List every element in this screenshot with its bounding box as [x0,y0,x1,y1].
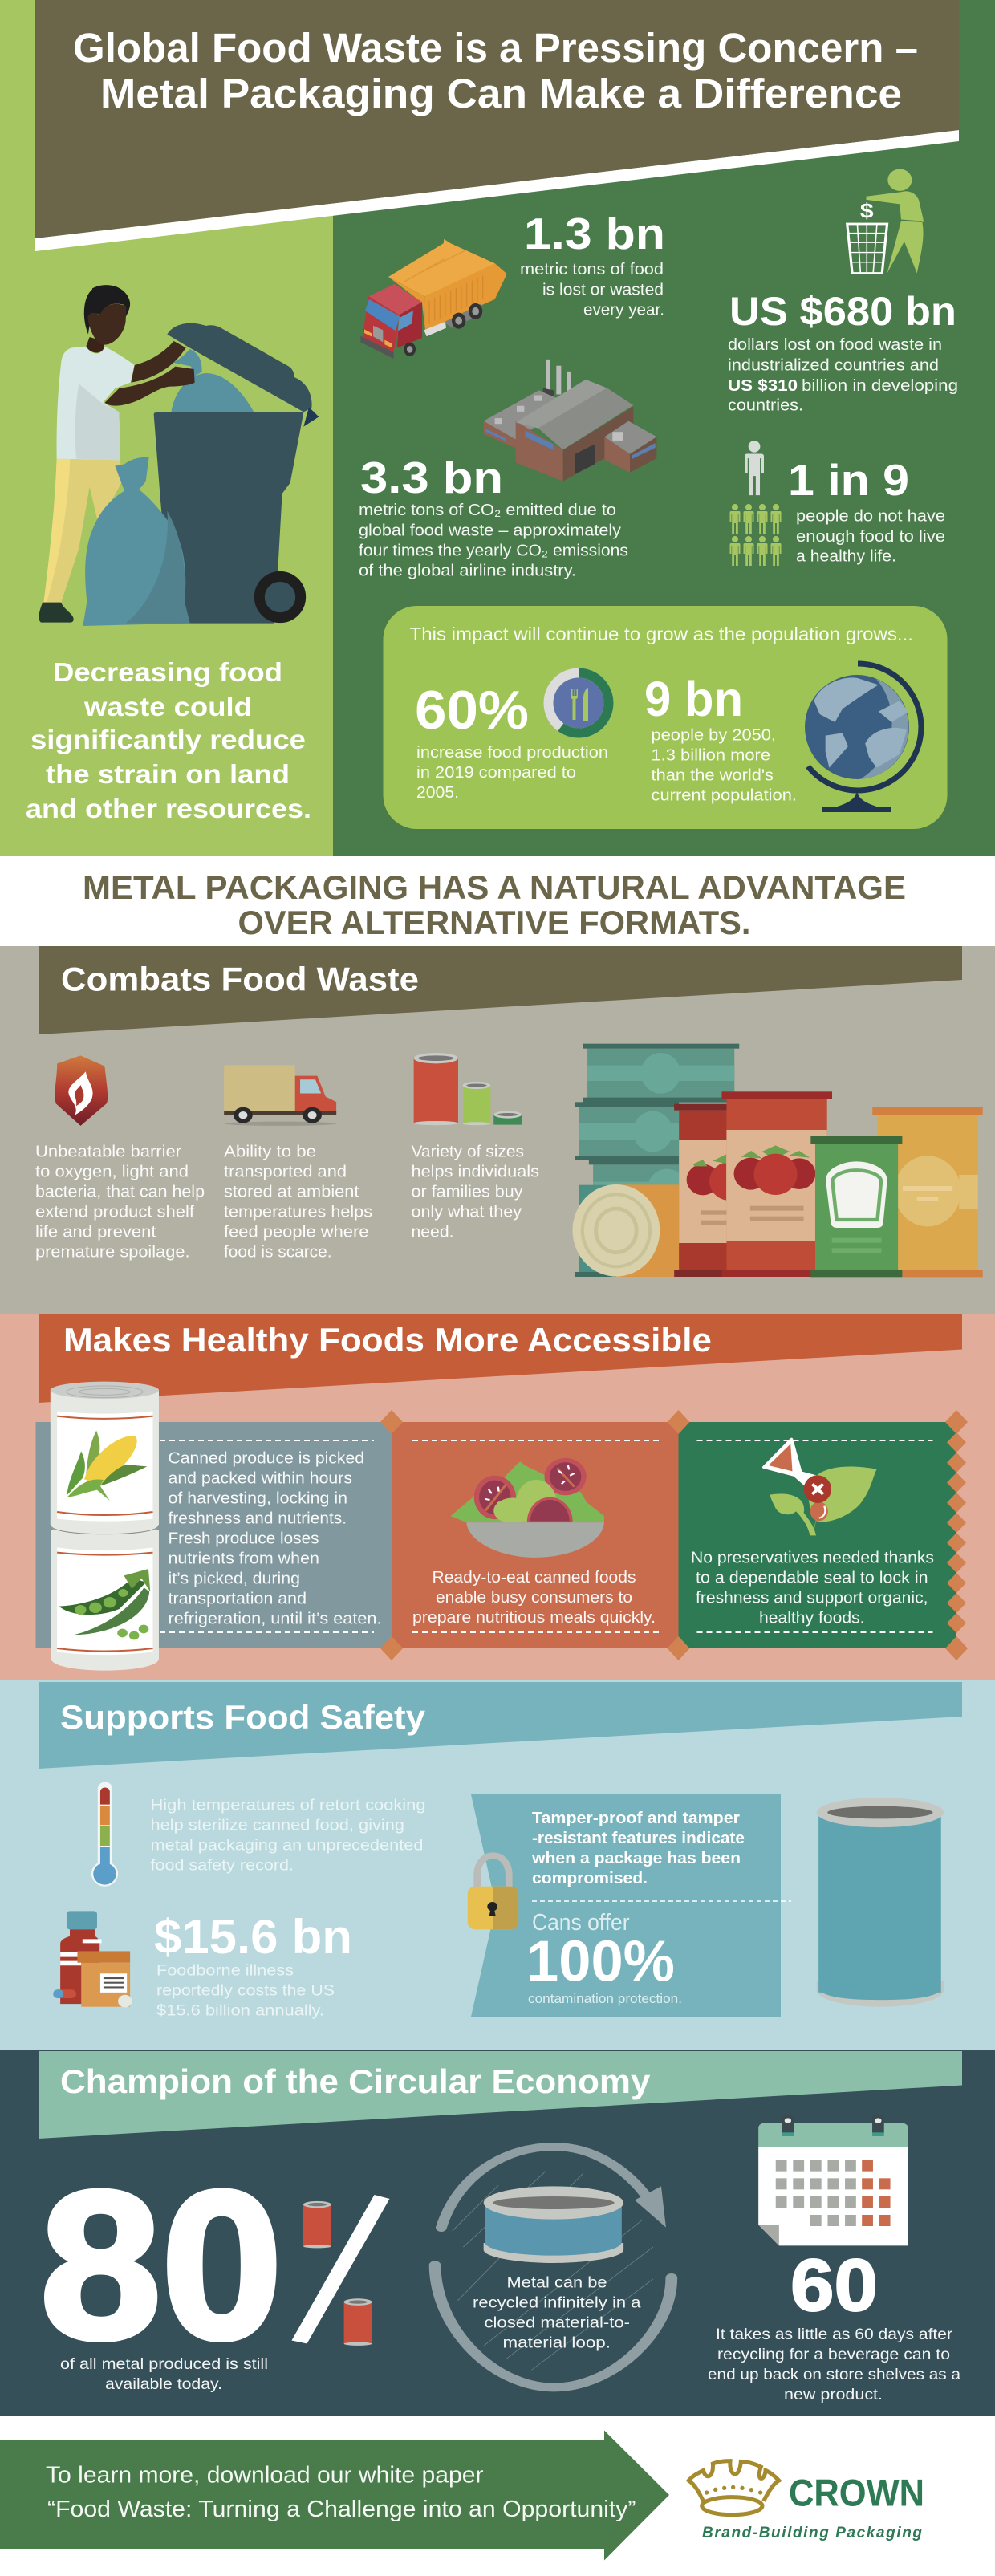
section banner: Makes Healthy Foods More Accessible [63,1321,712,1359]
icon: one person [745,441,764,495]
stat: 100% [526,1910,682,2006]
icon: calendar [758,2115,908,2245]
illustration: stacked produce cans [51,1382,159,1671]
heading: metal packaging advantage: METAL PACKAGING HAS A NATURAL ADVANTAGE [83,868,906,906]
arrow: call to action: “Food Waste: Turning a Challenge into an Opportunity” [47,2497,636,2522]
decorative diamonds [380,1410,968,1660]
icon: crown [688,2461,779,2515]
stat: US $680 bn: dollars lost on food waste in [728,335,942,354]
text: recycled infinitely [473,2274,641,2351]
text: ready-to-eat: Ready-to-eat canned foods [432,1568,636,1587]
stat: 60 days [708,2245,960,2403]
stat: 100%: 100% [526,1929,675,1993]
panel: healthy foods [0,1314,995,1680]
stat: 60%: 2005. [416,783,459,802]
text: transport: stored at ambient [224,1183,359,1201]
stat: 60 days: recycling for a beverage can to [717,2346,950,2363]
icon: medicine bottles [53,1911,132,2007]
stat: 60%: 60% [415,680,529,741]
panel heading: This impact will continue to grow as the population grows... [409,624,913,644]
text: sizes [411,1143,539,1241]
logo: Crown: CROWN [789,2472,924,2513]
arrow: call to action [0,2430,669,2560]
text: decreasing food waste: waste could [83,692,252,721]
text: canned produce [169,1449,382,1627]
icon: globe [805,664,921,812]
text: decreasing food waste: significantly reduce [30,725,306,754]
stat: 80% [40,2147,390,2393]
section banner: Supports Food Safety [60,1698,426,1736]
text: barrier: Unbeatable barrier [35,1143,181,1160]
text: no preservatives: freshness and support organic, [696,1589,928,1607]
stat: 100%: Cans offer [532,1910,630,1936]
stat: 9 bn: people by 2050, [652,725,776,745]
title banner [35,0,959,238]
stat: 9 bn: 1.3 billion more [652,746,770,764]
text: barrier: bacteria, that can help [35,1183,205,1201]
stat: 1.3 bn [520,209,665,319]
text: transport: feed people where [224,1223,369,1241]
panel: combats food waste [0,946,995,1314]
text: decreasing food waste: and other resources. [26,794,311,823]
stat: 80%: of all metal produced is still [60,2355,268,2373]
illustration: person with trash bin [39,285,319,626]
stat: $15.6 bn: reportedly costs the US [156,1982,335,2000]
stat: 60%: increase food production [416,743,608,762]
diagram: recycling loop [435,2147,672,2387]
text: sizes: or families buy [411,1183,523,1201]
text: recycled infinitely: closed material-to- [485,2314,630,2332]
icon: peas [59,1569,150,1639]
text: ready-to-eat: prepare nutritious meals quickly. [412,1608,656,1627]
stat: 9 bn: than the world's [652,766,774,785]
icon: person discarding money in bin [847,169,924,273]
title banner: Metal Packaging Can Make a Difference [100,71,902,116]
stat: 60% [415,680,608,802]
icon: three can sizes [414,1053,522,1125]
panel: ready-to-eat [392,1422,679,1648]
stat: 3.3 bn: of the global airline industry. [359,562,576,579]
text: canned produce: and packed within hours [169,1469,352,1488]
stat: 1 in 9 [788,455,945,565]
icon: factory [484,360,656,481]
text: canned produce: freshness and nutrients. [169,1509,347,1528]
stat: 3.3 bn: global food waste – approximately [359,522,622,539]
stat: 9 bn: 9 bn [644,672,743,726]
icon: small cans [303,2201,372,2346]
text: sizes: need. [411,1223,454,1241]
section banner [39,946,962,1034]
icon: large can [817,1798,944,2007]
stat: 3.3 bn [359,453,628,579]
arrow: call to action: To learn more, download our white paper [46,2462,484,2488]
stat: 1 in 9: enough food to live [796,527,945,546]
stat: 1 in 9: 1 in 9 [788,455,909,505]
text: barrier: to oxygen, light and [35,1162,189,1181]
icon: group of eight people [730,504,782,566]
text: tamper-proof: Tamper-proof and tamper [532,1809,740,1827]
text: canned produce: Fresh produce loses [169,1530,319,1547]
stat: 3.3 bn: metric tons of CO₂ emitted due to [359,501,616,519]
text: barrier: life and prevent [35,1223,156,1241]
stat: 60 days: end up back on store shelves as a [708,2366,960,2383]
text: recycled infinitely: Metal can be [507,2274,607,2292]
stat: 80%: 80 [40,2147,282,2383]
icon: delivery truck [224,1065,336,1126]
text: recycled infinitely: material loop. [502,2334,611,2351]
icon: thermometer [91,1782,118,1887]
text: transport: temperatures helps [224,1202,372,1221]
icon: salad bowl [450,1458,604,1558]
stat: 60 days: It takes as little as 60 days after [716,2326,953,2343]
text: tamper-proof: when a package has been [531,1849,741,1867]
text: tamper-proof: compromised. [532,1869,648,1887]
panel: canned produce [35,1422,392,1648]
text: sizes: only what they [411,1202,522,1221]
heading: metal packaging advantage [83,868,906,941]
text: decreasing food waste: the strain on land [46,759,290,789]
stat: 100%: contamination protection. [528,1991,682,2006]
text: decreasing food waste: Decreasing food [53,657,282,687]
text: recycled infinitely: recycled infinitely in a [473,2294,641,2311]
stat: US $680 bn [728,289,958,414]
text: canned produce: nutrients from when [169,1549,319,1568]
stat: 1 in 9: a healthy life. [796,547,896,565]
icon: leaf and blocked preservative dropper [764,1439,877,1535]
stat: $15.6 bn [154,1910,352,2019]
stat: 3.3 bn: 3.3 bn [360,453,503,502]
stat: US $680 bn: countries. [728,396,803,414]
text: ready-to-eat: enable busy consumers to [436,1588,632,1607]
section banner: Champion of the Circular Economy [60,2062,651,2100]
text: tamper-proof: -resistant features indicate [532,1829,745,1847]
text: decreasing food waste [26,657,311,823]
stat: US $680 bn: US $680 bn [729,289,956,334]
stat: 60%: in 2019 compared to [416,763,576,782]
text: canned produce: transportation and [169,1589,307,1608]
section banner [39,1682,962,1769]
text: ready-to-eat [412,1568,656,1627]
text: sizes: Variety of sizes [411,1143,524,1160]
icon: person discarding money in bin: $ [860,199,874,222]
heading: metal packaging advantage: OVER ALTERNATIVE FORMATS. [238,904,751,941]
text: transport [224,1143,372,1262]
stat: US $680 bn: billion in developing [802,376,958,395]
text: canned produce: it’s picked, during [169,1570,300,1587]
panel: tamper-proof [471,1794,791,2017]
text: no preservatives: to a dependable seal to lock in [696,1568,928,1587]
text: canned produce: Canned produce is picked [169,1449,364,1467]
text: retort cooking: help sterilize canned food, giving [151,1817,404,1834]
text: barrier: extend product shelf [35,1202,194,1221]
text: transport: transported and [224,1162,347,1181]
stat: 1.3 bn: is lost or wasted [542,281,664,299]
text: no preservatives: healthy foods. [759,1608,865,1627]
text: retort cooking: food safety record. [151,1857,294,1875]
logo: Crown: Brand-Building Packaging [702,2525,924,2541]
section banner: Combats Food Waste [61,960,419,998]
icon: padlock [468,1855,518,1929]
icon: plate donut chart [549,672,608,733]
stat: 1 in 9: people do not have [796,507,945,525]
stat: 9 bn [644,672,797,804]
stat: 60 days: 60 [790,2245,878,2326]
text: sizes: helps individuals [411,1162,539,1181]
title banner: Global Food Waste is a Pressing Concern – [73,25,918,71]
text: barrier: premature spoilage. [35,1242,189,1262]
panel: population growth [384,606,947,829]
panel: global food waste [0,0,995,856]
stat: 60 days: new product. [784,2386,883,2403]
text: canned produce: of harvesting, locking in [169,1489,347,1507]
icon: garbage truck [360,239,507,359]
logo: Crown [688,2461,924,2541]
stat: 80%: available today. [105,2375,222,2393]
text: retort cooking: metal packaging an unprecedented [151,1836,424,1854]
section banner [39,2051,962,2139]
stat: $15.6 bn: $15.6 bn [154,1910,352,1964]
text: barrier [35,1143,205,1262]
stat: 1.3 bn: 1.3 bn [524,209,665,258]
icon: flame shield [55,1055,108,1126]
text: retort cooking: High temperatures of retort cooking [151,1796,425,1814]
text: transport: Ability to be [224,1143,316,1160]
section banner [39,1314,962,1403]
illustration: stacked cans [573,1044,983,1277]
text: canned produce: refrigeration, until it’s eaten. [169,1610,382,1627]
text: no preservatives [691,1549,934,1627]
text: transport: food is scarce. [224,1242,332,1262]
panel: no preservatives [679,1422,956,1648]
panel: food safety [0,1680,995,2050]
stat: US $680 bn: industrialized countries and [728,356,939,374]
panel: circular economy [0,2050,995,2416]
stat: 3.3 bn: four times the yearly CO₂ emissions [359,541,628,560]
stat: $15.6 bn: Foodborne illness [156,1961,294,1979]
stat: 9 bn: current population. [652,786,797,804]
text: no preservatives: No preservatives needed thanks [691,1549,934,1566]
text: retort cooking [151,1796,425,1875]
icon: corn [67,1431,147,1501]
text: tamper-proof [531,1809,745,1887]
stat: 1.3 bn: metric tons of food [520,260,664,278]
stat: US $680 bn: US $310 [728,376,798,395]
stat: 1.3 bn: every year. [583,300,664,319]
stat: $15.6 bn: $15.6 billion annually. [156,2001,324,2019]
